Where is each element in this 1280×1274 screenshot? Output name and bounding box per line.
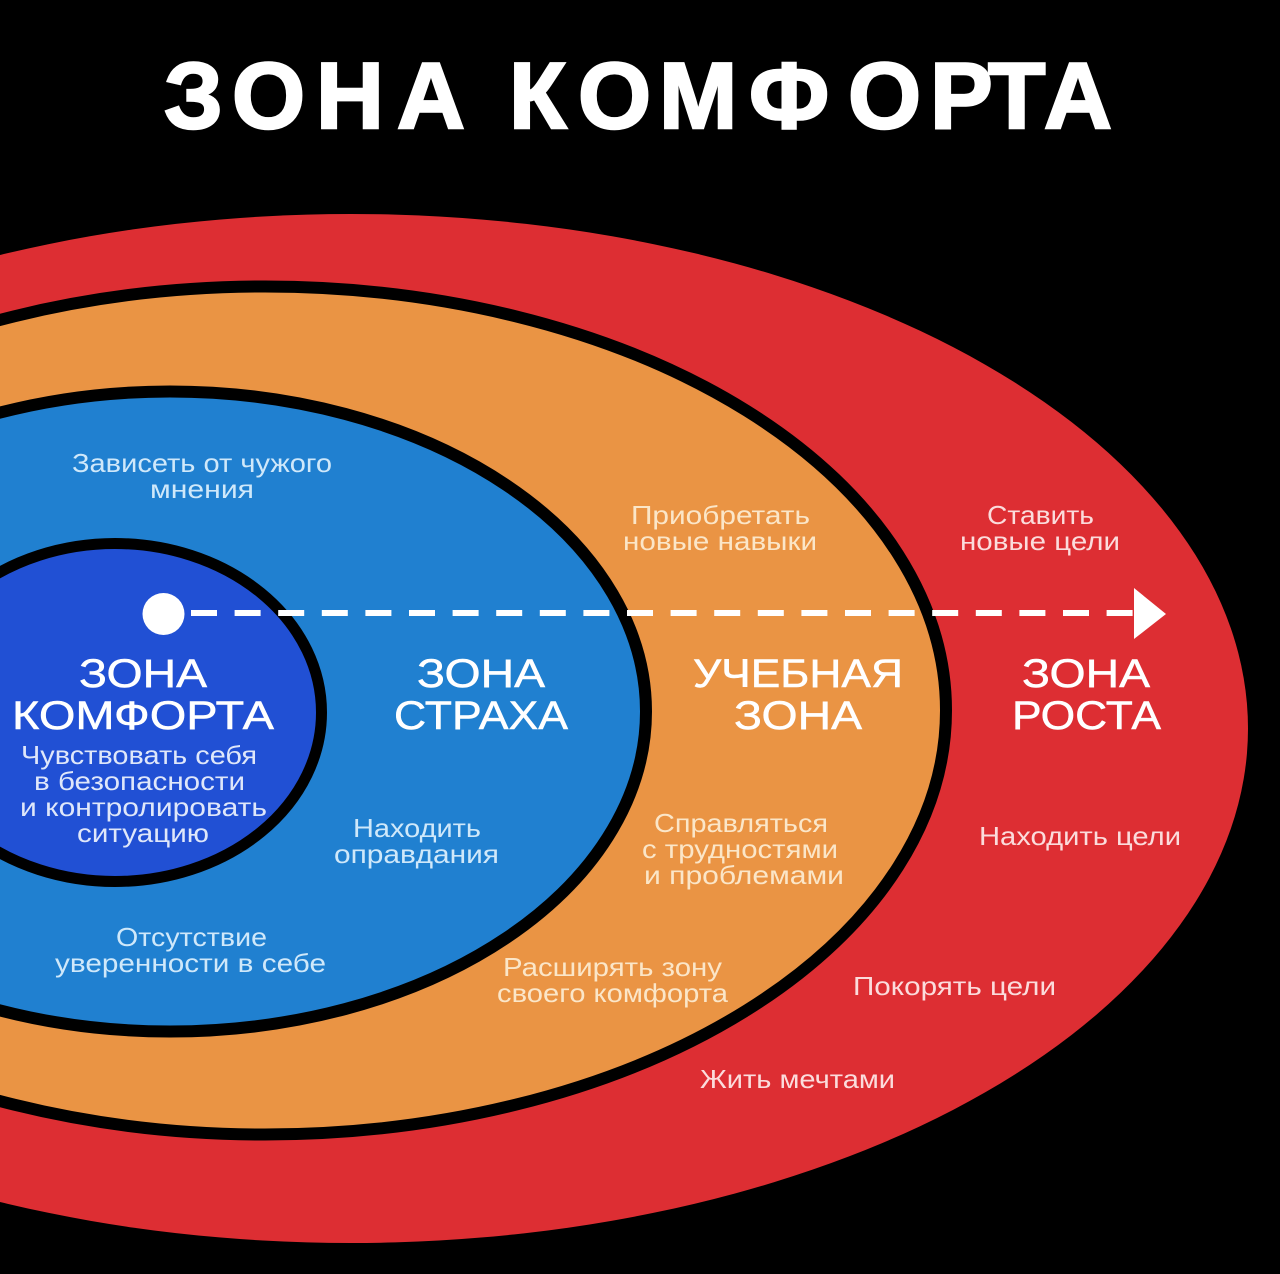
text: new skills: [623, 500, 817, 556]
text: comfort zone description: в безопасности: [34, 766, 245, 796]
icon: start dot: [142, 593, 184, 635]
text: depend on others: [72, 448, 332, 504]
text: cope with difficulties: [642, 808, 844, 890]
text: find excuses: оправдания: [334, 839, 499, 869]
text: set new goals: Ставить: [987, 500, 1094, 530]
text: lack of confidence: [55, 922, 326, 978]
heading: comfort zone: ЗОНА: [79, 652, 207, 696]
text: comfort zone description: ситуацию: [77, 818, 209, 848]
heading: comfort zone: КОМФОРТА: [12, 694, 274, 738]
text: comfort zone description: Чувствовать себя: [21, 740, 257, 770]
heading: growth zone: ЗОНА: [1022, 652, 1150, 696]
text: cope with difficulties: и проблемами: [644, 860, 844, 890]
text: comfort zone description: [20, 740, 267, 848]
heading: learning zone: ЗОНА: [734, 694, 862, 738]
zone ellipse: comfort (dark blue): [0, 544, 322, 882]
text: set new goals: [960, 500, 1120, 556]
text: find goals: Находить цели: [979, 821, 1181, 851]
title: ЗОНА КОМФОРТА: [164, 43, 1112, 148]
heading: fear zone: СТРАХА: [394, 694, 568, 738]
text: expand comfort zone: своего комфорта: [497, 978, 729, 1008]
text: depend on others: мнения: [150, 474, 254, 504]
zone ellipse: growth (red): [0, 214, 1248, 1243]
text: new skills: новые навыки: [623, 526, 817, 556]
text: depend on others: Зависеть от чужого: [72, 448, 332, 478]
text: conquer goals: Покорять цели: [853, 971, 1056, 1001]
zone ellipse: learning (orange): [0, 286, 946, 1134]
text: expand comfort zone: [497, 952, 729, 1008]
heading: growth zone: РОСТА: [1012, 694, 1161, 738]
text: lack of confidence: уверенности в себе: [55, 948, 326, 978]
text: new skills: Приобретать: [631, 500, 810, 530]
heading: comfort zone: [12, 652, 274, 738]
heading: learning zone: УЧЕБНАЯ: [693, 652, 903, 696]
heading: fear zone: [394, 652, 568, 738]
text: live dreams: Жить мечтами: [700, 1064, 895, 1094]
zone ellipse: fear (blue): [0, 392, 646, 1032]
text: expand comfort zone: Расширять зону: [503, 952, 722, 982]
text: set new goals: новые цели: [960, 526, 1120, 556]
text: cope with difficulties: с трудностями: [642, 834, 838, 864]
text: lack of confidence: Отсутствие: [116, 922, 267, 952]
text: comfort zone description: и контролировать: [20, 792, 267, 822]
arrow: path from comfort to growth: [191, 588, 1166, 639]
heading: growth zone: [1012, 652, 1161, 738]
text: cope with difficulties: Справляться: [654, 808, 828, 838]
heading: learning zone: [693, 652, 903, 738]
heading: fear zone: ЗОНА: [417, 652, 545, 696]
text: find excuses: Находить: [353, 813, 481, 843]
text: find excuses: [334, 813, 499, 869]
